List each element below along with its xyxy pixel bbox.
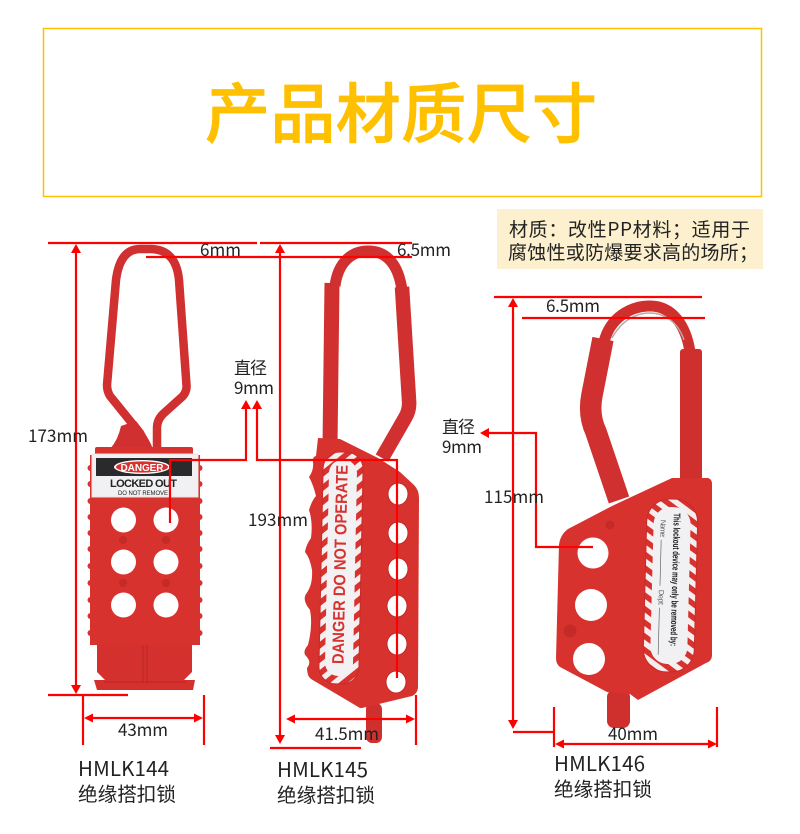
label: DANGER DO NOT OPERATE — [329, 465, 352, 664]
tail pin — [607, 690, 630, 728]
shackle — [330, 251, 409, 458]
dimension labels: HMLK144: 直径 — [234, 354, 267, 379]
holes — [573, 538, 608, 675]
caption: HMLK144 — [78, 752, 176, 807]
danger label — [92, 454, 198, 497]
danger label: LOCKED OUT — [110, 478, 177, 490]
dimension labels: HMLK146: 直径 — [442, 413, 475, 438]
material note — [497, 209, 763, 269]
title banner — [44, 28, 762, 196]
danger label: DANGER — [120, 463, 164, 474]
label: This lockout device may only be removed by: — [667, 513, 682, 646]
body — [556, 478, 712, 700]
dimension labels: HMLK145: 6.5mm — [397, 236, 451, 261]
dimension lines: HMLK146 — [480, 297, 717, 748]
caption: HMLK144: 绝缘搭扣锁 — [78, 778, 176, 807]
dimension labels: HMLK146: 9mm — [442, 433, 482, 458]
caption: HMLK145: 绝缘搭扣锁 — [277, 779, 375, 808]
label: Name: — [658, 520, 668, 538]
dimension labels: HMLK145: 41.5mm — [315, 720, 379, 745]
dimension labels: HMLK146: 115mm — [484, 483, 544, 508]
dimension labels: HMLK144: 173mm — [28, 422, 88, 447]
dimension labels: HMLK144: 6mm — [200, 236, 241, 261]
danger label: DO NOT REMOVE — [118, 491, 168, 497]
label — [319, 452, 363, 684]
body — [304, 438, 419, 708]
label — [643, 498, 698, 673]
dimension labels: HMLK145 — [248, 236, 451, 745]
dimension lines: HMLK144 — [48, 243, 412, 745]
label: Dept: — [656, 590, 666, 606]
shackle — [591, 306, 702, 500]
dimension lines: HMLK145 — [252, 243, 416, 748]
caption: HMLK146 — [554, 747, 652, 802]
product: HMLK146 hasp — [556, 306, 712, 728]
caption: HMLK145: HMLK145 — [277, 753, 368, 783]
dimension labels: HMLK146 — [442, 292, 658, 745]
dimension labels: HMLK144: 43mm — [118, 716, 168, 741]
caption: HMLK144: HMLK144 — [78, 752, 169, 782]
holes — [386, 483, 408, 693]
product: HMLK144 hasp — [88, 249, 202, 690]
caption: HMLK146: 绝缘搭扣锁 — [554, 773, 652, 802]
shackle — [107, 249, 187, 452]
product: HMLK145 hasp — [304, 251, 419, 743]
tail pin — [366, 703, 382, 743]
material note: 材质：改性PP材料；适用于 — [509, 215, 750, 242]
dimension labels: HMLK145: 193mm — [248, 506, 308, 531]
caption: HMLK145 — [277, 753, 375, 808]
body — [88, 447, 202, 690]
caption: HMLK146: HMLK146 — [554, 747, 645, 777]
dimension labels: HMLK146: 6.5mm — [546, 292, 600, 317]
dimension labels: HMLK144: 9mm — [234, 374, 274, 399]
title: 产品材质尺寸 — [205, 62, 597, 156]
material note: 腐蚀性或防爆要求高的场所； — [508, 238, 758, 265]
dimension labels: HMLK146: 40mm — [608, 720, 658, 745]
dimension labels: HMLK144 — [28, 236, 274, 741]
holes — [111, 508, 178, 618]
